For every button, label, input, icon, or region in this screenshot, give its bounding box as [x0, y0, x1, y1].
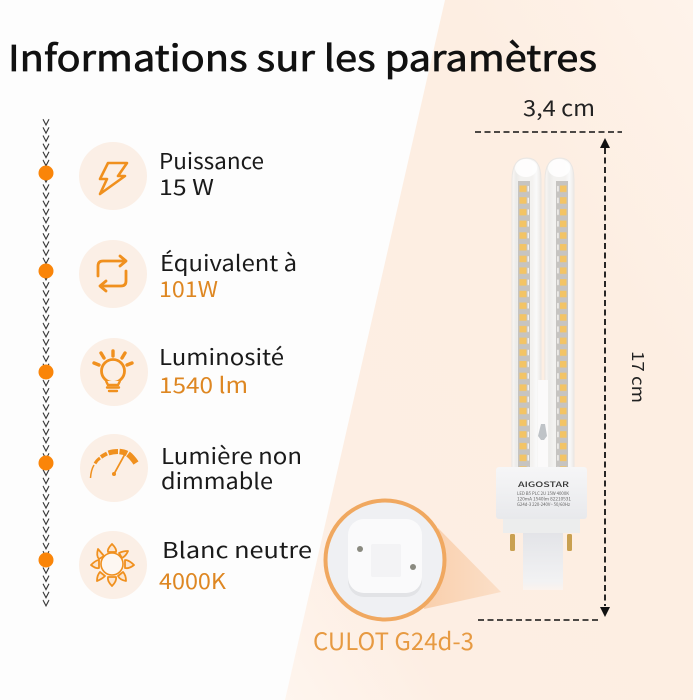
bulb base: [496, 467, 587, 590]
parameter: équivalent: 101W: [159, 272, 218, 304]
icon: dimmer gauge: [80, 434, 148, 502]
dimension: width: 3,4 cm: [523, 91, 595, 123]
right tube: [545, 158, 574, 470]
parameter: luminosité: [159, 340, 284, 400]
dimension: height arrow: 17 cm: [627, 351, 652, 403]
parameter: équivalent: Équivalent à: [160, 246, 297, 278]
bulb base: AIGOSTAR: [518, 480, 570, 490]
parameter: lumière non dimmable: [161, 439, 302, 496]
base close-up: [326, 500, 444, 620]
parameter: puissance: 15 W: [159, 170, 214, 202]
parameter: puissance: [159, 144, 264, 202]
filament bridge: [538, 380, 548, 467]
bulb base: 120mA 1540lm 82210531: [517, 496, 571, 502]
icon: light bulb: [80, 338, 148, 406]
bottom dashed line: [478, 619, 598, 621]
parameter: luminosité: Luminosité: [159, 340, 284, 372]
parameter: blanc neutre: 4000K: [159, 564, 227, 596]
background peach panel: [285, 0, 693, 700]
left tube: [512, 158, 541, 470]
icon: neutral white sun: [79, 531, 147, 599]
title: Informations sur les paramètres: [8, 31, 597, 82]
parameter: puissance: Puissance: [159, 144, 264, 176]
dimension: height arrow: [600, 138, 652, 617]
icon: power bolt: [79, 142, 147, 210]
timeline with chevrons and dots: [38, 118, 54, 608]
bulb base: LED B5 PLC 2U 15W 4000K: [517, 491, 569, 497]
bulb: [496, 158, 587, 590]
parameter: blanc neutre: [159, 533, 312, 596]
parameter: luminosité: 1540 lm: [159, 368, 248, 400]
parameter: équivalent: [159, 246, 297, 304]
zoom cone: [424, 528, 501, 609]
bulb base: G24d-3 220-240V~ 50/60Hz: [517, 501, 571, 508]
parameter: lumière non dimmable: dimmable: [161, 464, 273, 496]
icon: equivalence arrows: [79, 240, 147, 308]
base label: CULOT G24d-3: [313, 622, 474, 657]
parameter: blanc neutre: Blanc neutre: [162, 533, 312, 565]
parameter: lumière non dimmable: Lumière non: [161, 439, 302, 471]
